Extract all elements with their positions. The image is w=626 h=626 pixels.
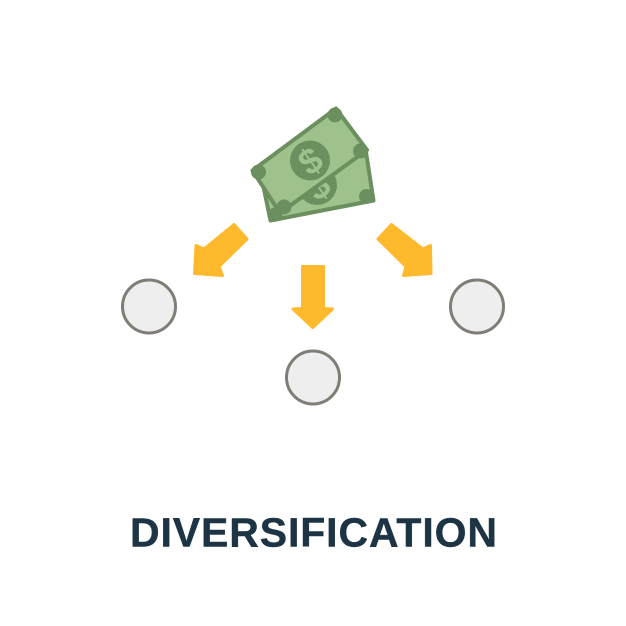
front bill: $: [290, 138, 330, 183]
circle: right: [450, 280, 504, 333]
title: DIVERSIFICATION: [130, 510, 497, 556]
arrow: left: [194, 224, 247, 276]
icon: money bills: [251, 108, 374, 222]
circle: left: [122, 280, 176, 333]
infographic canvas: [121, 106, 505, 548]
circle: center: [286, 351, 340, 404]
arrow: down: [293, 266, 332, 328]
arrow: right: [378, 224, 431, 276]
back bill: $: [298, 164, 338, 209]
